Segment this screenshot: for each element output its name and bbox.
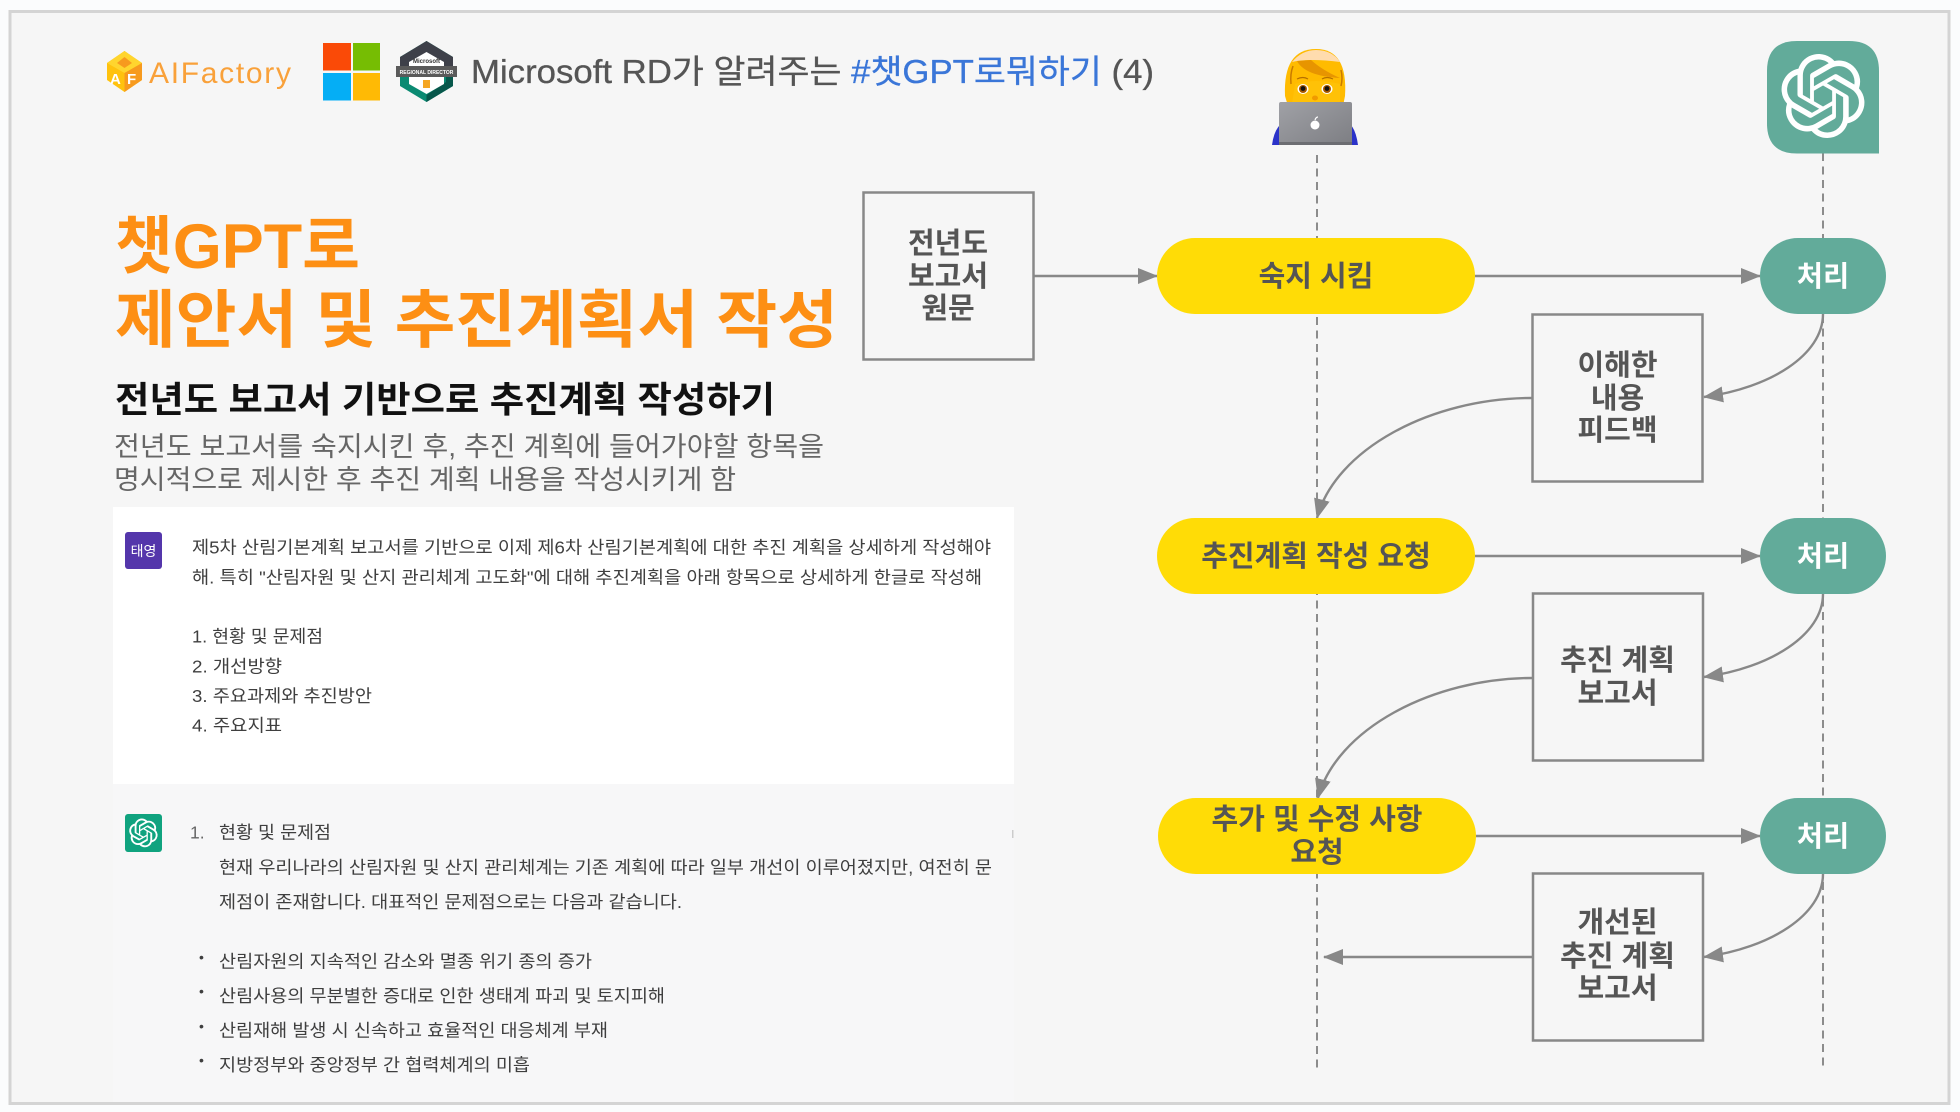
box: source report: 보고서 [908, 260, 988, 293]
badge: Microsoft Regional Director [396, 41, 457, 102]
panel: user prompt [113, 507, 1014, 784]
step 1: user request [1157, 238, 1475, 314]
box: source report [864, 192, 1034, 360]
prompt text [192, 538, 991, 736]
prompt text: 4. 주요지표 [192, 716, 282, 736]
icon: ChatGPT avatar [125, 814, 162, 852]
step 1: user request: 숙지 시킴 [1259, 260, 1373, 293]
step 3: revision request: 추가 및 수정 사항 [1212, 803, 1422, 836]
description text: 전년도 보고서를 숙지시킨 후, 추진 계획에 들어가야할 항목을 [114, 432, 824, 462]
arrow: step 2 to processing [1475, 555, 1760, 557]
arrow: report to step 3 [1318, 678, 1533, 798]
answer text: • [199, 1018, 204, 1034]
step 3: revision request [1158, 798, 1476, 874]
answer text: 지방정부와 중앙정부 간 협력체계의 미흡 [219, 1055, 530, 1075]
answer text: 현황 및 문제점 [219, 822, 331, 842]
processing node 1: 처리 [1797, 261, 1849, 293]
box: improved report: 개선된 [1577, 906, 1658, 939]
box: source report: 원문 [921, 292, 975, 325]
prompt text: 해. 특히 "산림자원 및 산지 관리체계 고도화"에 대해 추진계획을 아래 항목으로 상세하게 한글로 작성해 [192, 568, 982, 588]
prompt text: 3. 주요과제와 추진방안 [192, 686, 372, 706]
header title: Microsoft RD가 알려주는 #챗GPT로뭐하기 (4) [471, 53, 1154, 90]
processing node 3: 처리 [1797, 821, 1849, 853]
arrow: step 3 to processing [1476, 835, 1760, 837]
main heading: 챗GPT로 [115, 212, 360, 282]
arrow: step 1 to processing [1475, 275, 1760, 277]
description text: 명시적으로 제시한 후 추진 계획 내용을 작성시키게 함 [114, 465, 736, 495]
answer text: • [199, 983, 204, 999]
logo: AIFactory: AIFactory [149, 57, 291, 90]
box: feedback: 이해한 [1577, 349, 1658, 382]
icon: technologist emoji [1272, 49, 1358, 145]
logo: AIFactory: A [110, 71, 121, 88]
box: plan report [1533, 594, 1703, 760]
answer text: • [199, 949, 204, 965]
prompt text: 제5차 산림기본계획 보고서를 기반으로 이제 제6차 산림기본계획에 대한 추진 계획을 상세하게 작성해야 [192, 538, 991, 558]
arrow: source to step 1 [1034, 275, 1157, 277]
main heading [115, 212, 838, 356]
box: improved report: 추진 계획 [1560, 940, 1675, 973]
arrow: processing 3 to improved report [1704, 874, 1823, 957]
icon: user avatar [125, 532, 162, 569]
answer text: 산림재해 발생 시 신속하고 효율적인 대응체계 부재 [219, 1020, 608, 1040]
badge: Microsoft Regional Director: Microsoft [413, 59, 440, 65]
main heading: 제안서 및 추진계획서 작성 [115, 286, 838, 356]
answer text [190, 822, 992, 1075]
subheading: 전년도 보고서 기반으로 추진계획 작성하기 [115, 379, 775, 420]
arrow: processing 1 to feedback [1704, 314, 1823, 397]
box: improved report: 보고서 [1577, 972, 1658, 1005]
answer text: 1. [190, 822, 205, 842]
arrow: processing 2 to report [1704, 594, 1823, 677]
box: feedback [1532, 314, 1702, 482]
step 2: plan request: 추진계획 작성 요청 [1201, 540, 1431, 573]
box: improved report [1533, 874, 1703, 1040]
box: plan report: 보고서 [1577, 677, 1658, 710]
prompt text: 2. 개선방향 [192, 656, 282, 676]
prompt text: 1. 현황 및 문제점 [192, 626, 323, 646]
logo: Microsoft [323, 43, 380, 100]
answer text: 산림자원의 지속적인 감소와 멸종 위기 종의 증가 [219, 952, 592, 972]
processing node 2 [1760, 518, 1886, 594]
description text [114, 432, 824, 495]
panel: ChatGPT answer [113, 784, 1014, 1102]
step 3: revision request: 요청 [1290, 836, 1344, 869]
step 2: plan request [1157, 518, 1475, 594]
answer text: 제점이 존재합니다. 대표적인 문제점으로는 다음과 같습니다. [219, 892, 682, 912]
processing node 1 [1760, 238, 1886, 314]
box: feedback: 피드백 [1577, 414, 1658, 447]
logo: AIFactory: F [127, 71, 136, 88]
dashed lifeline: user [1316, 155, 1318, 1069]
box: feedback: 내용 [1591, 382, 1644, 415]
answer text: 현재 우리나라의 산림자원 및 산지 관리체계는 기존 계획에 따라 일부 개선이 이루어졌지만, 여전히 문 [219, 858, 992, 878]
logo: AIFactory [107, 51, 291, 92]
icon: ChatGPT logo tile [1767, 41, 1879, 154]
icon: user avatar: 태영 [131, 543, 156, 559]
answer text: 산림사용의 무분별한 증대로 인한 생태계 파괴 및 토지피해 [219, 986, 665, 1006]
box: plan report: 추진 계획 [1560, 644, 1675, 677]
processing node 3 [1760, 798, 1886, 874]
processing node 2: 처리 [1797, 541, 1849, 573]
badge: Microsoft Regional Director: REGIONAL DIRECTOR [400, 70, 454, 76]
dashed lifeline: ChatGPT [1822, 153, 1824, 1069]
arrow: feedback to step 2 [1317, 398, 1532, 518]
arrow: improved report to user [1324, 956, 1533, 958]
box: source report: 전년도 [908, 227, 988, 260]
answer text: • [199, 1052, 204, 1068]
